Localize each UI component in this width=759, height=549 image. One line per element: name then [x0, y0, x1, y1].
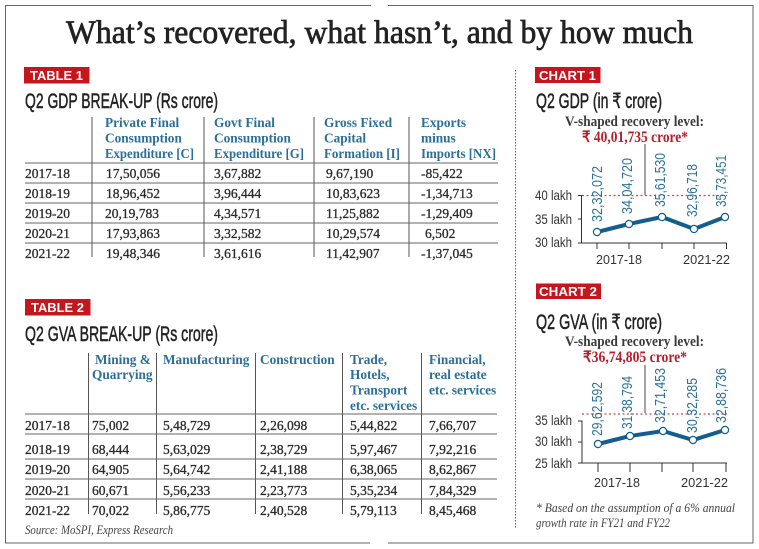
axes: 35 lakh — [535, 412, 572, 428]
table 2 rows: 2018-19 — [25, 442, 70, 457]
table 1 rows: 3,67,882 — [214, 166, 261, 181]
data labels: GDP: 32,96,718 — [685, 164, 701, 217]
table 1 rows: 2017-18 — [25, 166, 70, 181]
table 1 rows: 17,50,056 — [106, 166, 160, 181]
tag: table 1 — [24, 67, 90, 84]
data labels: GDP: 32,32,072 — [590, 166, 606, 222]
table 1 rows: 10,29,574 — [326, 226, 380, 241]
table 2 rows: 7,66,707 — [429, 418, 476, 433]
table 1 column headers: Capital — [324, 130, 366, 146]
data labels: GDP: 35,73,451 — [714, 155, 730, 207]
table 1 rows: 3,96,444 — [214, 186, 262, 201]
table 1 rows: 2021-22 — [25, 246, 70, 261]
title: What’s recovered, what hasn’t, and by how much — [66, 15, 693, 51]
table 2 column headers: Transport — [350, 382, 408, 398]
table 2 column headers: real estate — [429, 367, 487, 382]
table 2 rows: 2,23,773 — [260, 483, 308, 498]
data labels: GVA: 32,88,736 — [714, 368, 730, 423]
tag: chart 2: CHART 2 — [539, 285, 597, 299]
table 1 rows: 2018-19 — [25, 186, 70, 201]
table 1 column headers: Formation [I] — [324, 146, 400, 161]
callout: recovery level: V-shaped recovery level: — [565, 334, 704, 350]
table 2 rows: 2019-20 — [25, 462, 70, 477]
table 2 rows: 8,45,468 — [429, 503, 476, 518]
table 1 rows: 18,96,452 — [106, 186, 160, 201]
table 1 rows: -1,37,045 — [421, 246, 473, 261]
table 1 rows: 20,19,783 — [105, 206, 159, 221]
tag: table 2: TABLE 2 — [31, 301, 84, 315]
panel: table 1 — [24, 67, 498, 261]
table 2 rows: 68,444 — [92, 442, 129, 457]
table 1 column headers: Expenditure [G] — [214, 146, 304, 161]
table 2 rows: 5,64,742 — [163, 462, 210, 477]
table 2 rows: 5,97,467 — [350, 442, 398, 457]
data labels: GVA: 29,62,592 — [590, 382, 606, 436]
data labels: GDP: 34,04,720 — [620, 158, 636, 214]
callout: recovery level — [565, 334, 704, 413]
table 2 rows — [25, 418, 476, 518]
table 1 rows: -1,29,409 — [421, 206, 473, 221]
table 2 rows: 2,40,528 — [260, 503, 308, 518]
axes: 2017-18 — [594, 475, 640, 490]
footnote: growth rate in FY21 and FY22 — [536, 515, 670, 530]
table 2 rows: 5,35,234 — [350, 483, 398, 498]
table 1 column headers: Consumption — [105, 130, 182, 146]
heading: Q2 GDP: Q2 GDP (in ₹ crore) — [536, 90, 662, 113]
table 1 rows: 11,25,882 — [326, 206, 380, 221]
table 1 column headers: Gross Fixed — [324, 115, 393, 130]
table 2 column headers: Manufacturing — [163, 352, 250, 367]
table 1 column headers — [105, 115, 496, 161]
table 2 rows: 2,26,098 — [260, 418, 308, 433]
table 1 column headers: minus — [421, 130, 456, 146]
table 1 rows: -85,422 — [421, 166, 463, 181]
table 2 rows: 7,84,329 — [429, 483, 476, 498]
recovery level line — [582, 194, 727, 196]
data labels: GVA: 32,71,453 — [653, 368, 669, 423]
table 1 rows: 19,48,346 — [106, 246, 160, 261]
table 1 rows: 6,502 — [425, 226, 455, 241]
table 2 column headers: etc. services — [429, 382, 496, 398]
table 1 rows: 17,93,863 — [106, 226, 160, 241]
heading: Q2 GVA: Q2 GVA (in ₹ crore) — [536, 311, 662, 334]
table 2 rows: 8,62,867 — [429, 462, 476, 477]
table 2 rows: 6,38,065 — [350, 462, 398, 477]
axes — [535, 412, 728, 490]
table 2 column headers: Mining & — [95, 352, 151, 367]
table 1 rows: 3,32,582 — [214, 226, 261, 241]
table 2 rows: 75,002 — [92, 418, 129, 433]
source note: Source: MoSPI, Express Research — [25, 523, 173, 537]
table 2 rows: 2017-18 — [25, 418, 70, 433]
table 1 rows: 4,34,571 — [214, 206, 261, 221]
table 2 rows: 5,63,029 — [163, 442, 210, 457]
table 1 column headers: Private Final — [105, 115, 180, 130]
axes: 25 lakh — [535, 455, 572, 471]
tag: chart 1: CHART 1 — [539, 69, 596, 83]
table 2 rows: 64,905 — [92, 462, 129, 477]
axes: 35 lakh — [535, 211, 572, 227]
table 1 rows: 2019-20 — [25, 206, 70, 221]
table 1 rows: -1,34,713 — [421, 186, 473, 201]
axes: 30 lakh — [535, 433, 572, 449]
table 1 grid — [25, 117, 498, 257]
line series: GVA — [594, 426, 729, 448]
footnote — [536, 500, 735, 530]
table 2 rows: 5,48,729 — [163, 418, 210, 433]
table 1 rows: 3,61,616 — [214, 246, 262, 261]
table 2 rows: 2,38,729 — [260, 442, 308, 457]
table 2 rows: 5,79,113 — [350, 503, 397, 518]
panel: table 2 — [25, 299, 497, 537]
table 1 column headers: Exports — [421, 115, 466, 130]
tag: table 2 — [25, 299, 90, 316]
table 2 column headers: Quarrying — [92, 367, 153, 382]
axes: 30 lakh — [535, 234, 572, 250]
table 1 column headers: Imports [NX] — [421, 146, 496, 161]
axes: 2021-22 — [681, 475, 728, 490]
table 2 column headers: Trade, — [350, 352, 387, 367]
table 1 rows: 2020-21 — [25, 226, 70, 241]
table 2 column headers: Hotels, — [350, 367, 390, 382]
callout: recovery level — [565, 114, 704, 195]
callout: recovery level: ₹ 40,01,735 crore* — [582, 129, 688, 146]
table 2 rows: 2021-22 — [25, 503, 70, 518]
recovery level line — [582, 413, 727, 415]
axes: 2017-18 — [596, 252, 642, 267]
table 2 grid — [25, 353, 497, 514]
footnote: * Based on the assumption of a 6% annual — [536, 500, 735, 515]
table 2 rows: 2,41,188 — [260, 462, 308, 477]
panel: chart 1 — [535, 67, 730, 267]
table 1 rows: 10,83,623 — [326, 186, 380, 201]
table 1 rows: 9,67,190 — [326, 166, 374, 181]
table 2 column headers: Financial, — [429, 352, 486, 367]
table 2 rows: 5,56,233 — [163, 483, 210, 498]
heading: Q2 GVA break-up: Q2 GVA BREAK-UP (Rs crore) — [25, 323, 218, 346]
axes: 2021-22 — [683, 252, 730, 267]
axes: 40 lakh — [535, 187, 572, 203]
callout: recovery level: V-shaped recovery level: — [565, 114, 704, 130]
table 2 rows: 70,022 — [92, 503, 129, 518]
tag: table 1: TABLE 1 — [30, 69, 83, 83]
line series: GDP — [593, 213, 729, 236]
data labels: GVA: 31,38,794 — [620, 376, 636, 429]
data labels: GVA: 30,32,285 — [685, 378, 701, 433]
table 1 column headers: Consumption — [214, 130, 291, 146]
data labels: GDP: 35,61,530 — [653, 153, 669, 207]
table 2 column headers: etc. services — [350, 398, 417, 413]
table 2 rows: 5,44,822 — [350, 418, 397, 433]
panel: chart 2 — [535, 284, 735, 530]
table 1 column headers: Govt Final — [214, 115, 275, 130]
axes — [535, 187, 730, 267]
heading: Q2 GDP break-up: Q2 GDP BREAK-UP (Rs crore) — [25, 90, 218, 113]
table 2 rows: 7,92,216 — [429, 442, 476, 457]
table 2 rows: 2020-21 — [25, 483, 70, 498]
data labels: GDP — [590, 153, 730, 222]
table 1 column headers: Expenditure [C] — [105, 146, 194, 161]
data labels: GVA — [590, 368, 730, 436]
callout: recovery level: ₹36,74,805 crore* — [583, 349, 687, 366]
table 2 column headers — [92, 352, 496, 413]
table 2 column headers: Construction — [260, 352, 335, 367]
table 2 rows: 5,86,775 — [163, 503, 210, 518]
table 1 rows: 11,42,907 — [326, 246, 380, 261]
table 1 rows — [25, 166, 473, 261]
table 2 rows: 60,671 — [92, 483, 129, 498]
